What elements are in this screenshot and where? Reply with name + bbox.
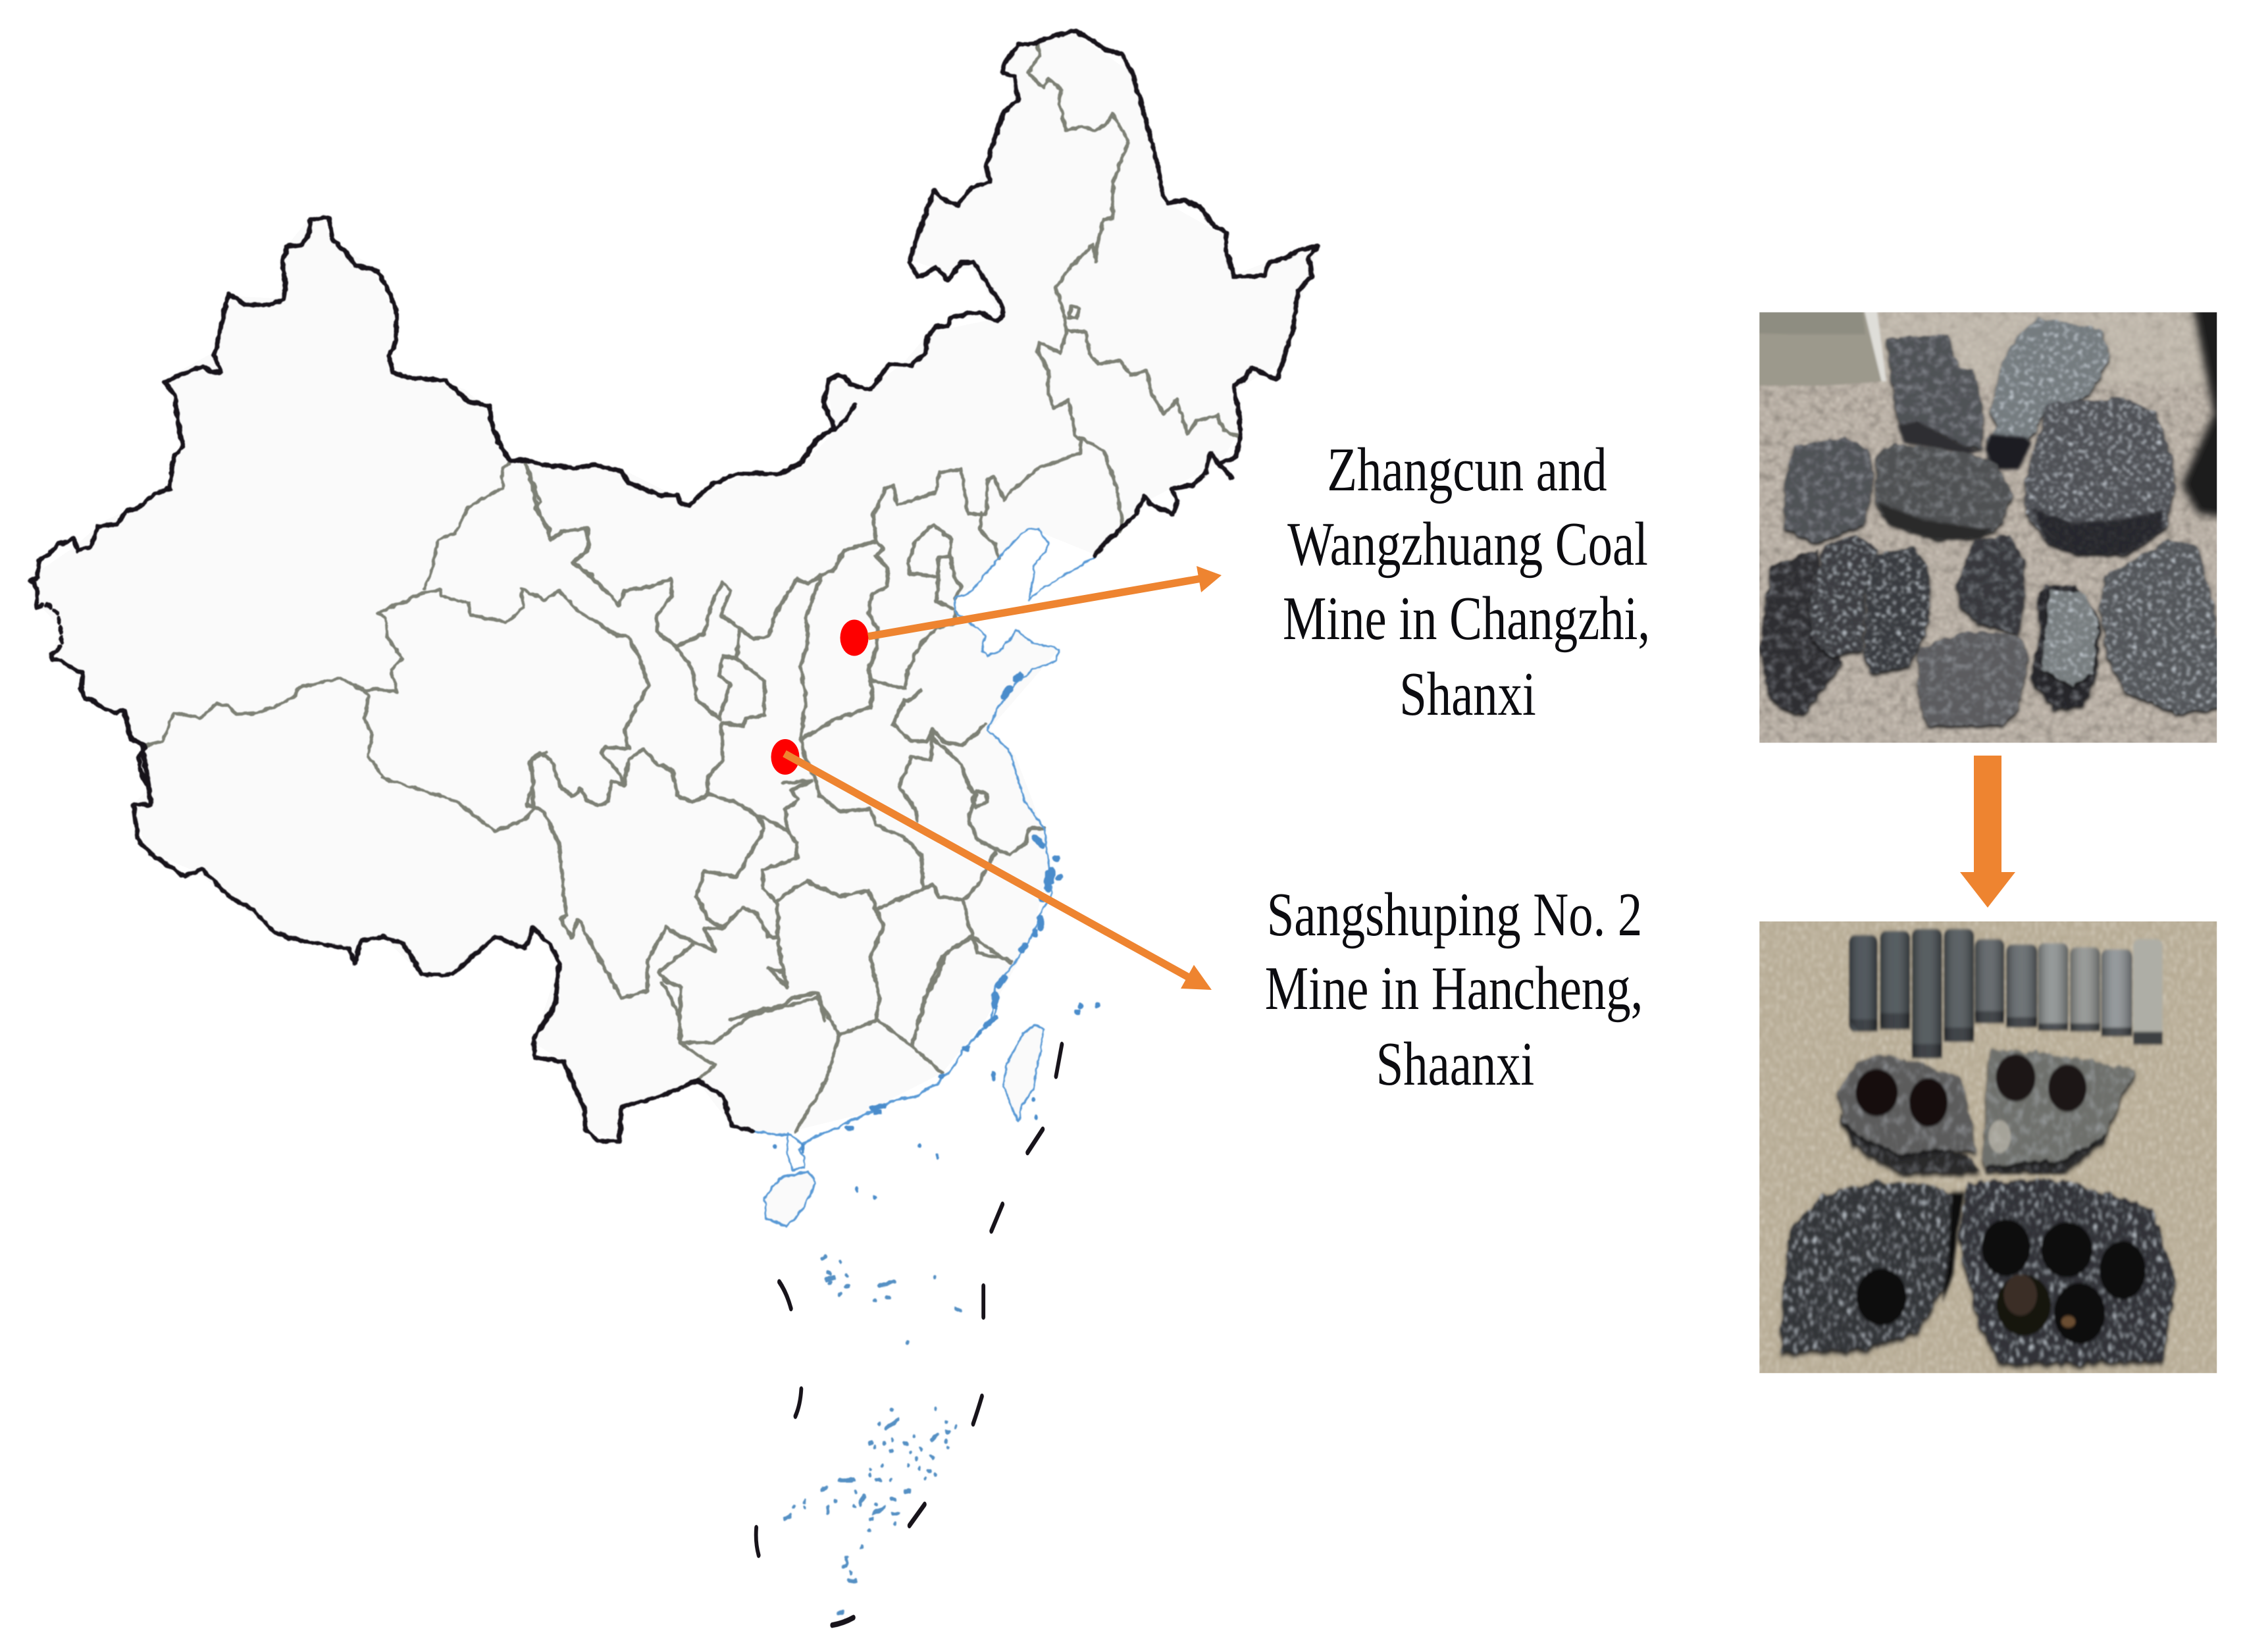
arrow: Shaanxi marker to label — [785, 754, 1212, 990]
nine-dash line — [756, 1045, 1062, 1625]
photo: drilled coal blocks and core specimens — [1759, 921, 2217, 1373]
marker: Zhangcun and Wangzhuang location — [840, 620, 869, 656]
label: Zhangcun and Wangzhuang Coal Mine in Changzhi, Shanxi: Wangzhuang Coal — [1287, 510, 1648, 579]
label: Sangshuping No. 2 Mine in Hancheng, Shaanxi: Mine in Hancheng, — [1265, 954, 1643, 1023]
label: Sangshuping No. 2 Mine in Hancheng, Shaanxi: Shaanxi — [1376, 1030, 1534, 1098]
label: Zhangcun and Wangzhuang Coal Mine in Changzhi, Shanxi: Zhangcun and — [1327, 436, 1607, 504]
coastline and islands — [754, 529, 1098, 1613]
marker: Sangshuping location — [771, 739, 799, 775]
middle drilled blocks — [1838, 1050, 2135, 1174]
arrow: Shanxi marker to label — [868, 566, 1222, 636]
label: Zhangcun and Wangzhuang Coal Mine in Changzhi, Shanxi: Shanxi — [1399, 660, 1536, 729]
label: Zhangcun and Wangzhuang Coal Mine in Changzhi, Shanxi — [1283, 436, 1650, 729]
map of China — [30, 31, 1318, 1625]
province borders — [145, 43, 1240, 1131]
national border — [30, 31, 1318, 1141]
photo: raw coal lumps — [1759, 312, 2217, 742]
label: Zhangcun and Wangzhuang Coal Mine in Changzhi, Shanxi: Mine in Changzhi, — [1283, 584, 1650, 653]
label: Sangshuping No. 2 Mine in Hancheng, Shaanxi: Sangshuping No. 2 — [1267, 881, 1642, 949]
land fill — [34, 34, 1316, 1141]
label: Sangshuping No. 2 Mine in Hancheng, Shaanxi — [1265, 881, 1643, 1098]
sea: Bohai and Yellow Sea cut-out — [955, 529, 1169, 656]
bottom drilled blocks — [1781, 1179, 2175, 1363]
arrow: raw coal to prepared specimens — [1960, 756, 2015, 908]
core specimens — [1849, 929, 2163, 1058]
